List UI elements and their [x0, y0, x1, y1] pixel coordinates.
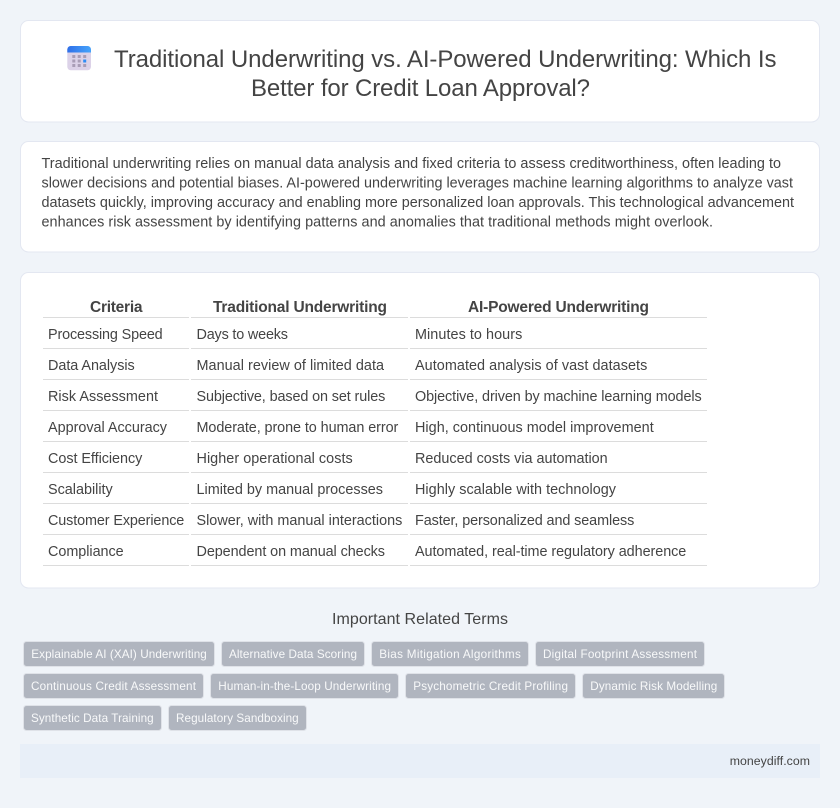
panel: introduction text [20, 142, 820, 252]
table row: Approval Accuracy [43, 420, 707, 442]
table row: Customer Experience: Faster, personalized and seamless [415, 513, 634, 529]
table row: Cost Efficiency: Higher operational costs [196, 451, 353, 467]
tag: Dynamic Risk Modelling [590, 680, 717, 693]
tag [24, 642, 214, 666]
tag: Regulatory Sandboxing [176, 712, 299, 725]
tag [24, 674, 204, 698]
text block: intro paragraph: slower decisions and potential biases. AI-powered underwriting leverages machine learning algorithms to analyze vast [42, 175, 793, 191]
table row: Risk Assessment [43, 389, 707, 411]
table header row: Criteria [90, 299, 143, 316]
text block: intro paragraph: Traditional underwriting relies on manual data analysis and fixed criteria to assess creditworthiness, often leading to [42, 156, 781, 172]
table row: Processing Speed: Processing Speed [48, 327, 163, 343]
table row: Compliance: Dependent on manual checks [196, 544, 385, 560]
table row: Data Analysis: Data Analysis [48, 358, 135, 374]
table row: Cost Efficiency: Cost Efficiency [48, 451, 143, 467]
table row: Cost Efficiency [43, 451, 707, 473]
table row: Approval Accuracy: High, continuous model improvement [415, 420, 654, 436]
table row: Scalability: Highly scalable with technology [415, 482, 617, 498]
table row: Processing Speed: Days to weeks [196, 327, 288, 343]
title: Better for Credit Loan Approval? [251, 75, 590, 102]
footer source text: moneydiff.com [730, 754, 810, 768]
tag [582, 674, 724, 698]
table row: Compliance: Compliance [48, 544, 124, 560]
footer [20, 744, 820, 778]
table row: Customer Experience: Slower, with manual interactions [196, 513, 402, 529]
tag: Alternative Data Scoring [229, 648, 357, 661]
title: Traditional Underwriting vs. AI-Powered Underwriting: Which Is [114, 46, 776, 73]
table row: Compliance [43, 544, 707, 566]
tag: Human-in-the-Loop Underwriting [218, 680, 391, 693]
title [114, 46, 776, 102]
table row: Processing Speed [43, 327, 707, 349]
table row: Risk Assessment: Objective, driven by machine learning models [415, 389, 702, 405]
tag: Synthetic Data Training [31, 712, 154, 725]
tag [210, 674, 398, 698]
table row: Data Analysis [43, 358, 707, 380]
text block: intro paragraph: datasets quickly, improving accuracy and enabling more personalized loan approvals. This technological advancement [42, 195, 794, 211]
table row: Customer Experience: Customer Experience [48, 513, 184, 529]
tag [536, 642, 704, 666]
text block: intro paragraph: enhances risk assessment by identifying patterns and anomalies that traditional methods might overlook. [42, 214, 713, 230]
table row: Scalability: Scalability [48, 482, 113, 498]
table row: Data Analysis: Automated analysis of vast datasets [415, 358, 647, 374]
table row: Scalability: Limited by manual processes [196, 482, 383, 498]
table header row [43, 299, 707, 318]
tag [372, 642, 528, 666]
tag [168, 706, 306, 730]
table row: Customer Experience [43, 513, 707, 535]
tag: Psychometric Credit Profiling [413, 680, 568, 693]
tag: Explainable AI (XAI) Underwriting [31, 648, 207, 661]
tag: Continuous Credit Assessment [31, 680, 197, 693]
table row: Approval Accuracy: Moderate, prone to human error [196, 420, 399, 436]
table row: Risk Assessment: Subjective, based on set rules [196, 389, 385, 405]
tag group: related terms [24, 642, 724, 730]
tag [406, 674, 576, 698]
table row: Approval Accuracy: Approval Accuracy [48, 420, 168, 436]
tag: Digital Footprint Assessment [543, 648, 698, 661]
tag [24, 706, 162, 730]
table row: Scalability [43, 482, 707, 504]
tag: Bias Mitigation Algorithms [379, 648, 521, 661]
heading: related terms: Important Related Terms [332, 611, 508, 628]
table row: Processing Speed: Minutes to hours [415, 327, 522, 343]
text block: intro paragraph [42, 156, 794, 230]
table row: Risk Assessment: Risk Assessment [48, 389, 158, 405]
panel: title header [20, 20, 820, 122]
table header row: AI-Powered Underwriting [468, 299, 649, 316]
icon: calendar [67, 46, 91, 70]
tag [222, 642, 364, 666]
table row: Compliance: Automated, real-time regulatory adherence [415, 544, 686, 560]
panel: comparison table [20, 272, 820, 588]
table row: Cost Efficiency: Reduced costs via automation [415, 451, 608, 467]
table header row: Traditional Underwriting [213, 299, 387, 316]
table row: Data Analysis: Manual review of limited data [196, 358, 384, 374]
